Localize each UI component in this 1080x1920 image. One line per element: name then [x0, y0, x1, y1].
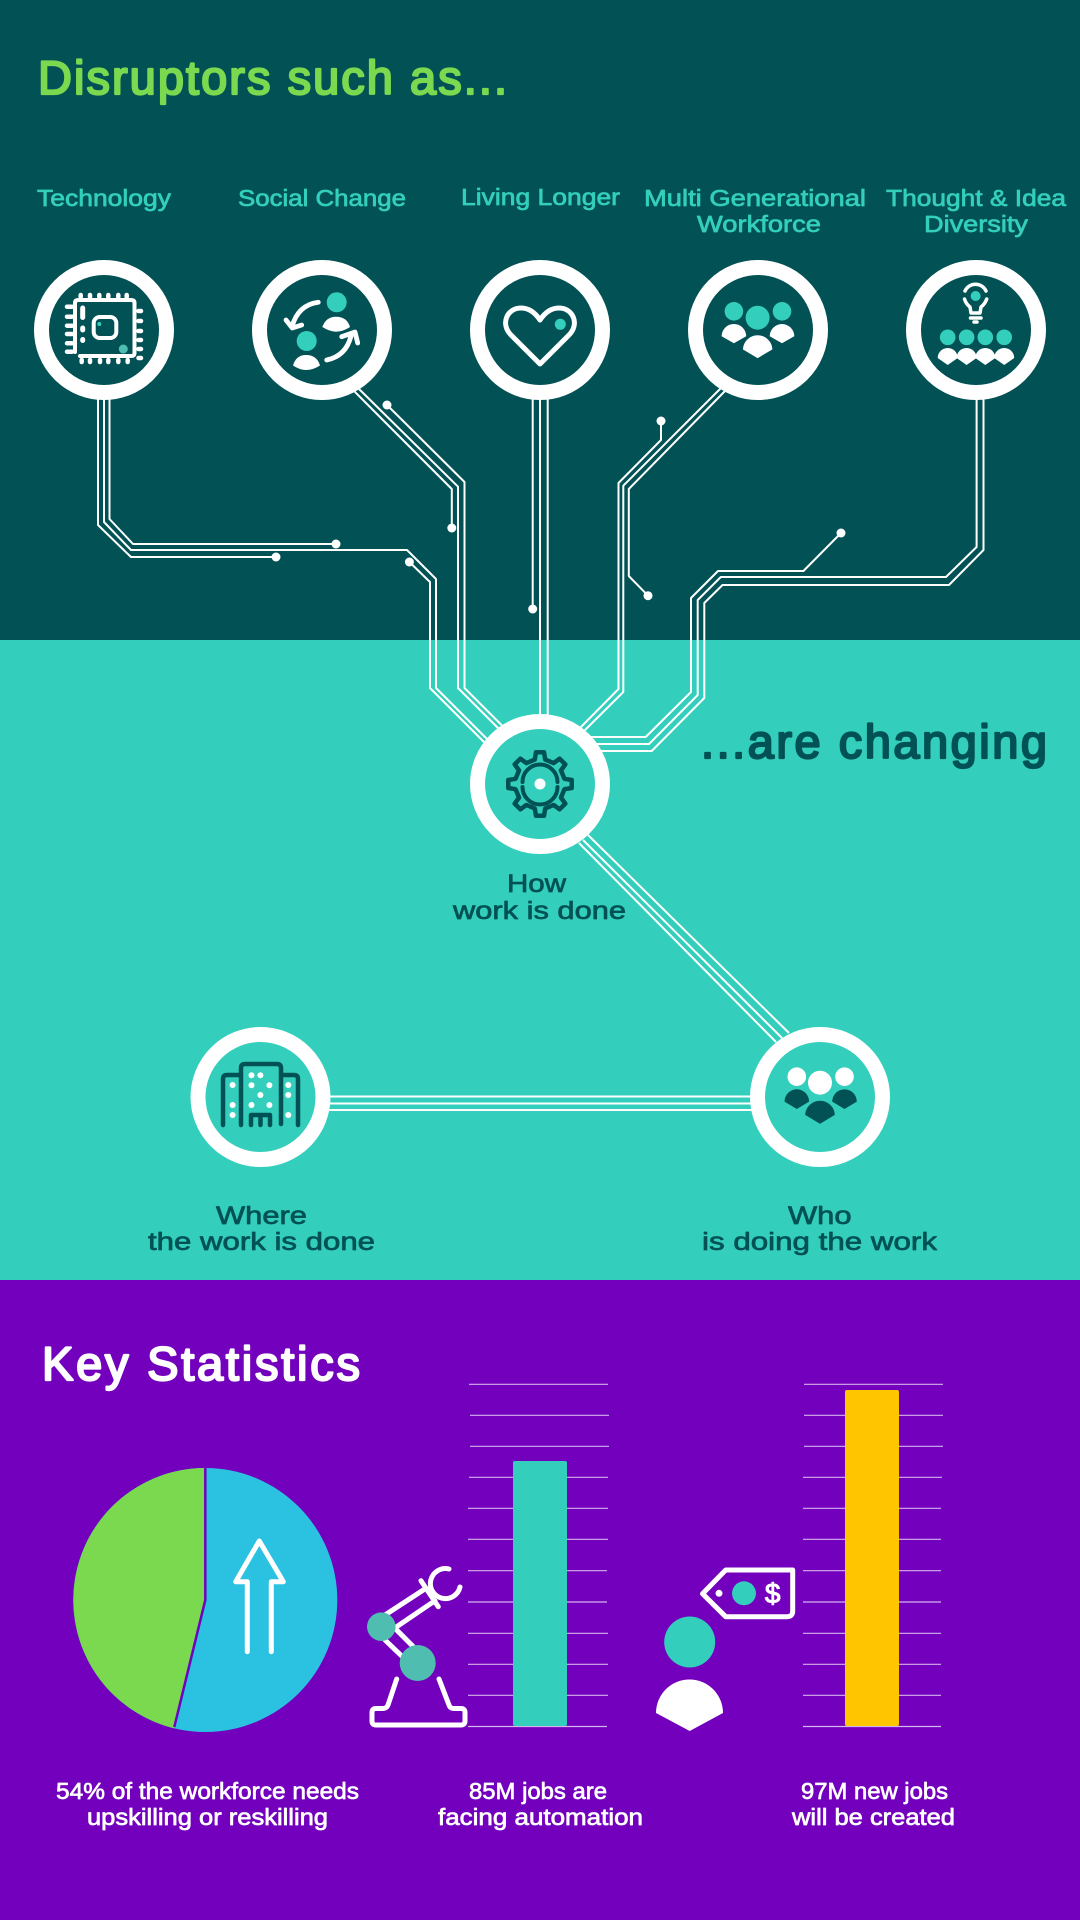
label: multi generational workforce [644, 185, 866, 237]
icon: people group [758, 1034, 882, 1160]
panel: disruptors [0, 0, 1080, 640]
label: multi generational workforce: Workforce [697, 211, 821, 237]
caption: 85M jobs: facing automation [438, 1804, 643, 1830]
connectors: circuit lines [98, 388, 984, 1110]
icon: office building [198, 1034, 323, 1160]
label: who is doing the work: is doing the work [702, 1228, 938, 1256]
label: where the work is done: the work is done [148, 1228, 375, 1256]
label: technology: Technology [37, 185, 172, 211]
bar chart: 85M jobs [468, 1384, 609, 1726]
label: who is doing the work: Who [788, 1202, 852, 1230]
label: how work is done: work is done [452, 897, 626, 925]
caption: 54 percent [56, 1778, 359, 1830]
label: how work is done [452, 870, 626, 925]
icon: social change [260, 268, 384, 392]
caption: 54 percent: 54% of the workforce needs [56, 1778, 359, 1804]
caption: 97M jobs: will be created [791, 1804, 955, 1830]
icon: up arrow [236, 1541, 283, 1652]
panel: are changing [0, 640, 1080, 1280]
icon: person with price tag: $ [765, 1578, 781, 1609]
label: living longer: Living Longer [461, 184, 620, 210]
icon: gear [478, 722, 602, 846]
caption: 97M jobs [791, 1778, 955, 1830]
label: how work is done: How [507, 870, 567, 898]
label: thought and idea diversity: Thought & Idea [886, 185, 1066, 211]
caption: 54 percent: upskilling or reskilling [87, 1804, 328, 1830]
icon: technology chip [42, 268, 166, 392]
heading: disruptors: Disruptors such as... [38, 51, 507, 104]
label: thought and idea diversity: Diversity [924, 211, 1029, 237]
heading: are changing: ...are changing [701, 715, 1047, 768]
caption: 85M jobs: 85M jobs are [469, 1778, 607, 1804]
caption: 85M jobs [438, 1778, 643, 1830]
panel: key statistics [0, 1280, 1080, 1920]
connector end dots [272, 400, 846, 614]
pie chart: 54 percent [73, 1468, 337, 1732]
label: where the work is done: Where [216, 1202, 307, 1230]
label: multi generational workforce: Multi Generational [644, 185, 866, 211]
icon: person with price tag [656, 1570, 793, 1731]
caption: 97M jobs: 97M new jobs [801, 1778, 948, 1804]
icon: idea diversity [914, 268, 1038, 392]
heading: key statistics: Key Statistics [42, 1337, 360, 1390]
bar chart: 97M jobs [803, 1384, 943, 1726]
label: where the work is done [148, 1202, 375, 1256]
label: thought and idea diversity [886, 185, 1066, 237]
icon: robot arm [367, 1569, 465, 1725]
icon: heart [478, 268, 602, 392]
label: social change: Social Change [238, 185, 406, 211]
icon: multi generational group [696, 268, 820, 392]
label: who is doing the work [702, 1202, 938, 1256]
